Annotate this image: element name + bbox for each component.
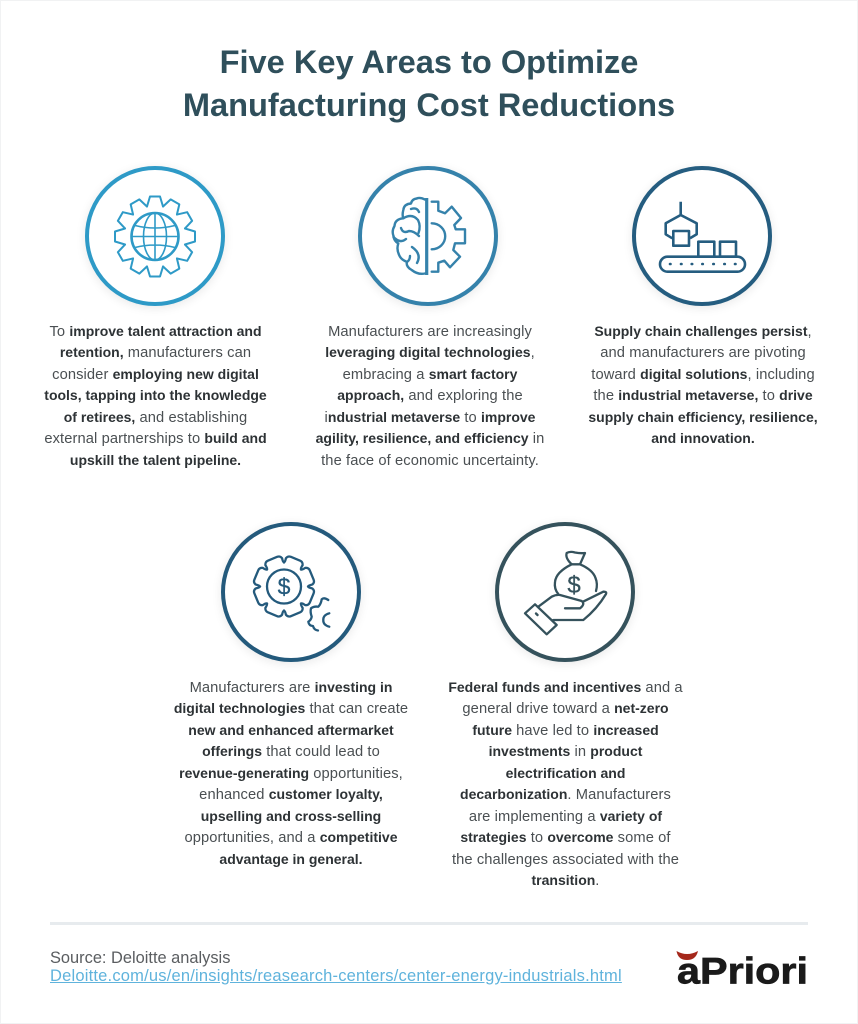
text: incentives [448, 678, 683, 889]
text: aftermarket: revenue-generating opportunities, [179, 764, 403, 782]
text: digital technologies [316, 324, 544, 468]
text: supply chain: supply chain efficiency, resilience, [588, 408, 818, 424]
circle: aftermarket [221, 522, 361, 662]
text: supply chain: the industrial metaverse, to drive [593, 387, 813, 404]
text: aftermarket: offerings that could lead to [202, 743, 380, 760]
text: aftermarket: new and enhanced aftermarket [188, 722, 394, 738]
text: talent: retention, manufacturers can [60, 344, 251, 361]
text: supply chain: and innovation. [651, 430, 755, 446]
text: digital technologies: the face of economic uncertainty. [321, 452, 539, 468]
text: talent: To improve talent attraction and [49, 322, 262, 340]
icon: globe in gear [114, 196, 196, 278]
text: incentives: the challenges associated with the [452, 852, 679, 868]
circle: incentives [495, 522, 635, 662]
text: aftermarket: Manufacturers are investing in [190, 678, 392, 696]
text: aftermarket: opportunities, and a competitive [184, 829, 398, 846]
circle: supply chain [632, 166, 772, 306]
text: incentives: transition. [532, 872, 599, 889]
text: incentives: investments in product [489, 743, 642, 760]
text: incentives: general drive toward a net-zero [462, 700, 669, 717]
text: aftermarket: advantage in general. [219, 850, 363, 866]
text: digital technologies: Manufacturers are increasingly [328, 324, 532, 340]
text: digital technologies: approach, and exploring the [337, 387, 523, 404]
text: aftermarket: digital technologies that can create [174, 700, 408, 717]
title: Manufacturing Cost Reductions [183, 86, 675, 123]
icon: hand holding money bag: $ [567, 572, 581, 599]
text: aftermarket: enhanced customer loyalty, [199, 786, 383, 803]
text: incentives: future have led to increased [472, 722, 659, 738]
text: talent: tools, tapping into the knowledge [44, 387, 267, 403]
source note [50, 949, 622, 985]
text: digital technologies: embracing a smart factory [343, 366, 517, 382]
source note: Source: Deloitte analysis [50, 949, 230, 967]
text: incentives: electrification and [506, 764, 625, 780]
source note: Deloitte.com/us/en/insights/reasearch-centers/center-energy-industrials.html [50, 967, 622, 985]
text: supply chain: toward digital solutions, including [591, 366, 815, 382]
title [183, 43, 675, 123]
text: talent: consider employing new digital [52, 366, 259, 382]
circle: digital technologies [358, 166, 498, 306]
text: digital technologies: industrial metaverse to improve [325, 408, 535, 426]
text: talent: of retirees, and establishing [64, 408, 247, 426]
text: talent: external partnerships to build and [44, 430, 267, 447]
text: incentives: are implementing a variety of [469, 808, 662, 824]
icon: dollar gear: $ [278, 574, 291, 600]
text: incentives: Federal funds and incentives and a [448, 678, 683, 696]
text: incentives: strategies to overcome some of [460, 829, 671, 846]
text: supply chain: and manufacturers are pivoting [600, 345, 806, 361]
icon: conveyor belt [658, 202, 746, 273]
text: digital technologies: leveraging digital technologies, [325, 344, 535, 361]
icon: hand holding money bag [524, 550, 608, 636]
text: digital technologies: agility, resilience, and efficiency in [316, 430, 544, 447]
text: aftermarket: upselling and cross-selling [201, 808, 381, 824]
text: incentives: decarbonization. Manufacturers [460, 786, 671, 803]
text: aftermarket [174, 678, 408, 867]
icon: dollar gear [252, 555, 330, 632]
icon: brain and gear [392, 196, 466, 275]
text: supply chain: Supply chain challenges persist, [594, 322, 812, 340]
title: Five Key Areas to Optimize [220, 43, 638, 80]
text: supply chain [588, 322, 818, 446]
text: talent: upskill the talent pipeline. [70, 452, 241, 468]
text: talent [44, 322, 267, 468]
circle: talent [84, 166, 224, 306]
